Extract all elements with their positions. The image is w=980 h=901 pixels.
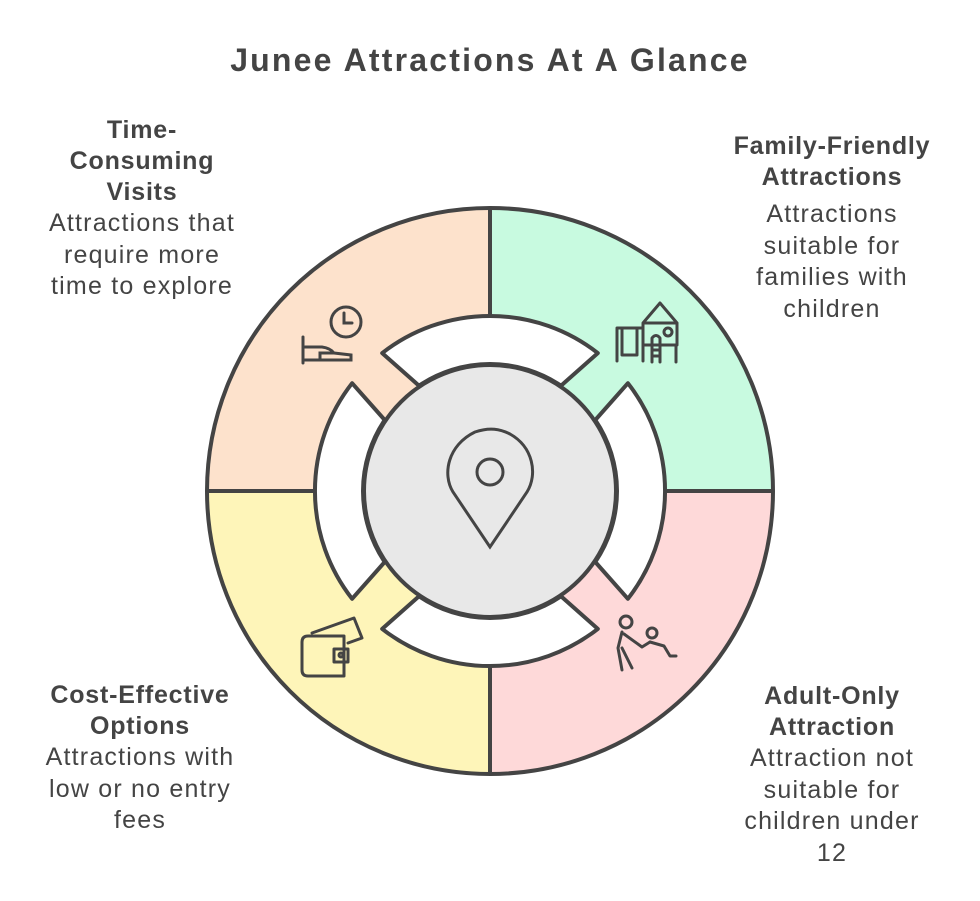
text: time-consuming visits: time to explore <box>51 272 233 300</box>
text: cost-effective options <box>46 681 234 834</box>
icon: location pin <box>448 429 533 547</box>
text: time-consuming visits: Visits <box>106 178 178 206</box>
text: adult-only attraction: 12 <box>817 838 847 866</box>
icon: playground <box>617 303 677 362</box>
text: cost-effective options: Options <box>90 712 190 740</box>
text: time-consuming visits: Time- <box>107 116 177 144</box>
quadrant: time-consuming (peach) <box>207 208 490 491</box>
text: adult-only attraction: Attraction not <box>750 744 914 772</box>
text: family-friendly attractions <box>734 132 930 322</box>
quadrant: family-friendly (green) <box>490 208 773 491</box>
quadrant: adult-only (pink) <box>490 491 773 774</box>
icon: wallet with money <box>302 618 362 676</box>
text: time-consuming visits: Consuming <box>70 147 214 175</box>
quadrant: cost-effective (yellow) <box>207 491 490 774</box>
text: cost-effective options: low or no entry <box>49 774 231 802</box>
text: time-consuming visits: Attractions that <box>49 209 235 237</box>
ring segments <box>315 316 665 666</box>
text: family-friendly attractions: children <box>783 294 881 322</box>
text: family-friendly attractions: Attractions <box>766 200 898 228</box>
text: family-friendly attractions: Attractions <box>762 163 902 191</box>
text: cost-effective options: Cost-Effective <box>50 681 230 709</box>
icon: clock and bed <box>303 307 361 363</box>
text: adult-only attraction: children under <box>744 807 920 835</box>
icon: adult and child <box>618 616 676 670</box>
center circle <box>364 365 616 617</box>
text: cost-effective options: Attractions with <box>46 743 234 771</box>
text: cost-effective options: fees <box>114 806 166 834</box>
text: adult-only attraction <box>744 682 920 866</box>
text: family-friendly attractions: families with <box>756 263 908 291</box>
text: adult-only attraction: suitable for <box>764 776 900 804</box>
text: adult-only attraction: Adult-Only <box>764 682 900 710</box>
text: time-consuming visits: require more <box>64 240 220 268</box>
text: family-friendly attractions: suitable for <box>764 232 900 260</box>
text: adult-only attraction: Attraction <box>769 713 895 741</box>
title: Junee Attractions At A Glance <box>230 42 750 78</box>
text: time-consuming visits <box>49 116 235 300</box>
text: family-friendly attractions: Family-Friendly <box>734 132 930 160</box>
